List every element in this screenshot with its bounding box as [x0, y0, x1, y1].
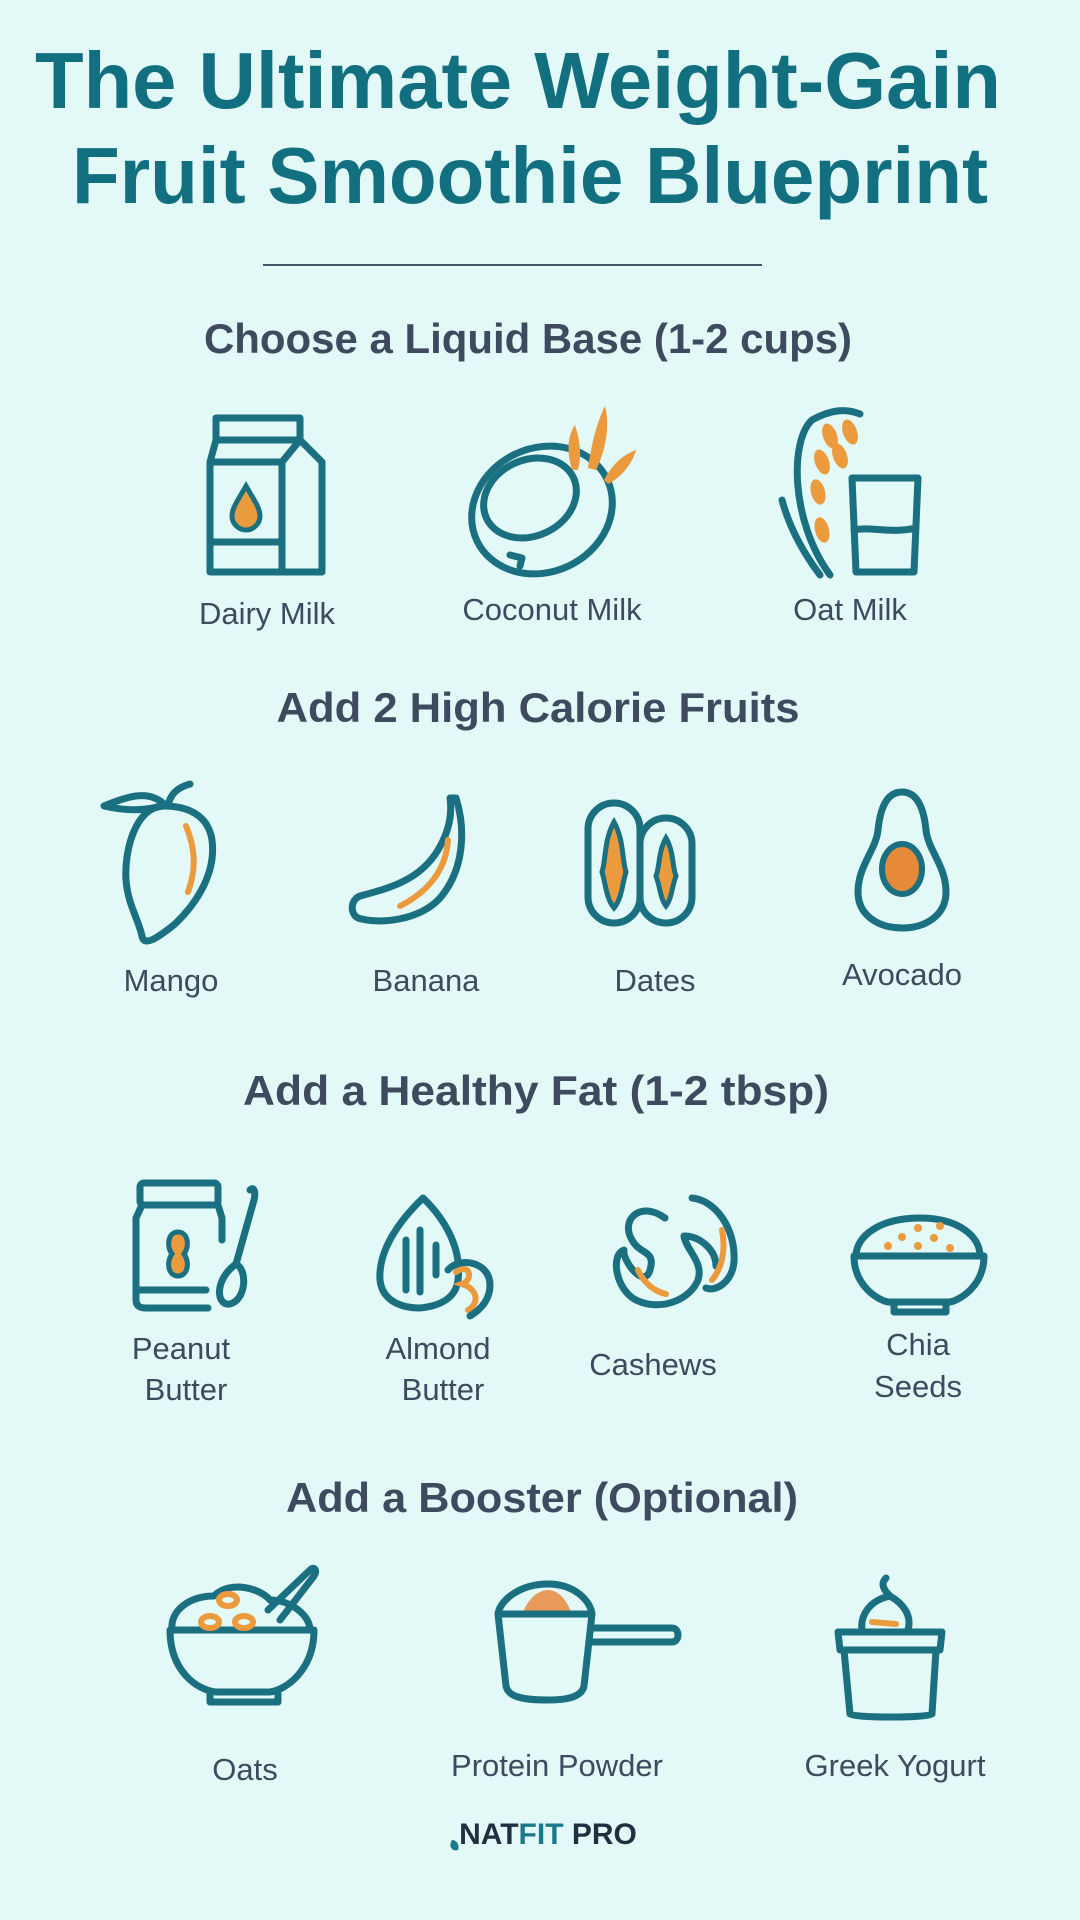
icon: dairy milk — [210, 418, 322, 572]
label: oats: Oats — [212, 1752, 278, 1787]
label: greek yogurt: Greek Yogurt — [805, 1748, 986, 1783]
icon: coconut — [451, 406, 636, 597]
title — [35, 36, 1001, 220]
icon: chia bowl — [854, 1218, 984, 1312]
label: chia seeds: Chia — [886, 1327, 951, 1362]
icon: almond butter — [380, 1198, 490, 1316]
label: chia seeds — [874, 1327, 962, 1404]
icon: protein scoop — [498, 1584, 678, 1700]
heading: fruits: Add 2 High Calorie Fruits — [276, 684, 800, 731]
label: protein powder: Protein Powder — [451, 1748, 663, 1783]
label: almond butter: Almond — [385, 1331, 491, 1366]
icon: oat milk — [782, 411, 918, 575]
icon: peanut butter — [136, 1183, 255, 1308]
label: oat milk: Oat Milk — [793, 592, 907, 627]
label: avocado: Avocado — [842, 957, 962, 992]
label: cashews: Cashews — [589, 1347, 717, 1382]
heading: healthy fat: Add a Healthy Fat (1-2 tbsp) — [243, 1067, 829, 1114]
label: mango: Mango — [124, 963, 218, 998]
icon: cashews — [616, 1198, 734, 1305]
icon: mango — [104, 784, 213, 941]
label: chia seeds: Seeds — [874, 1369, 962, 1404]
label: almond butter: Butter — [402, 1372, 484, 1407]
title: The Ultimate Weight-Gain — [35, 36, 1001, 125]
label: dates: Dates — [615, 963, 695, 998]
icon: banana — [352, 798, 462, 921]
label: peanut butter — [132, 1331, 231, 1407]
logo: NATFIT PRO — [459, 1818, 637, 1851]
label: dairy milk: Dairy Milk — [199, 596, 336, 631]
heading: liquid base: Choose a Liquid Base (1-2 cups) — [204, 315, 852, 362]
icon: greek yogurt — [838, 1578, 942, 1717]
label: peanut butter: Butter — [145, 1372, 227, 1407]
title: Fruit Smoothie Blueprint — [72, 131, 988, 220]
icon: oats bowl — [170, 1568, 316, 1702]
label: coconut milk: Coconut Milk — [462, 592, 642, 627]
label: peanut butter: Peanut — [132, 1331, 231, 1366]
icon: dates — [588, 803, 692, 923]
label: banana: Banana — [373, 963, 480, 998]
label: almond butter — [385, 1331, 491, 1407]
heading: booster: Add a Booster (Optional) — [286, 1474, 798, 1521]
icon: avocado — [858, 792, 946, 928]
